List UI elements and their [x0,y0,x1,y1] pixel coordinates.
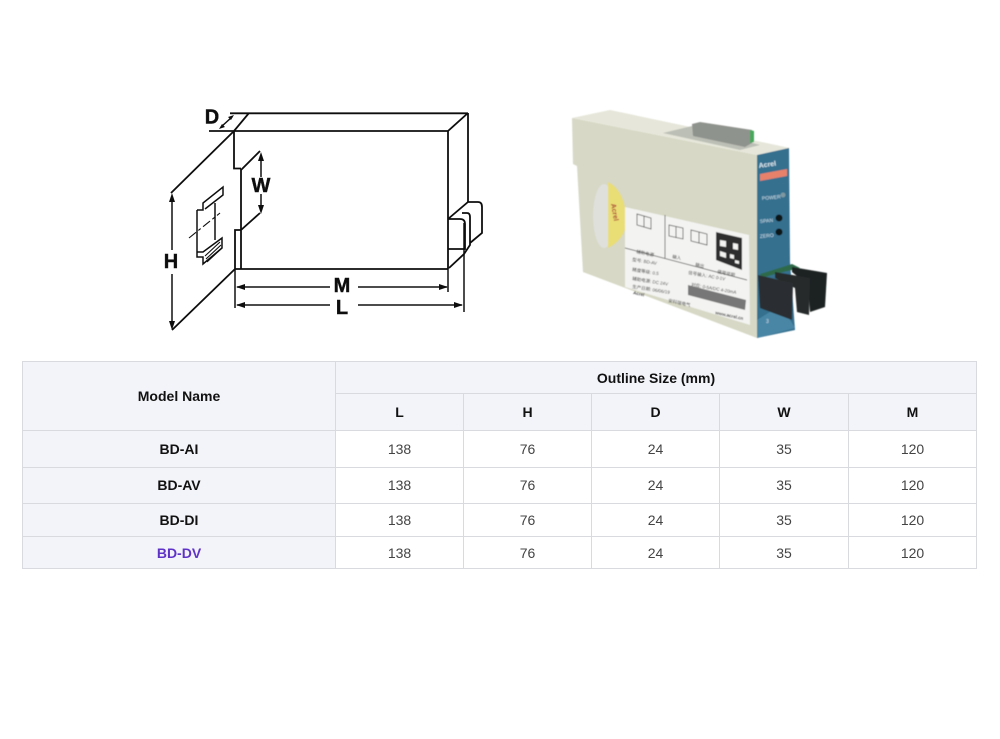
row: BD-AV: BD-AV [157,476,201,492]
extension lines [235,223,464,312]
label M: M [334,275,350,297]
header: model name: Model Name [138,388,220,404]
row: BD-AI: 35 [776,441,792,457]
row: BD-AV: 138 [388,476,411,492]
row: BD-DI: 120 [901,512,924,528]
panel labels: 3 [766,319,769,325]
dimension arrows [169,115,463,330]
arrow: H [169,193,175,330]
header: H: H [522,404,533,420]
header: L: L [395,404,404,420]
front panel [757,148,795,338]
arrow: M [236,284,448,290]
round sticker [593,182,627,248]
module top face [572,110,790,155]
white label: 对应: 0-5A/DC 4-20mA [691,281,737,296]
DIN rail cutout [197,187,223,264]
label H: H [164,251,178,273]
white label: 使用说明 [717,268,736,279]
led and knobs [776,192,786,236]
row: BD-DV: 76 [520,544,535,560]
row: BD-AI: 138 [388,441,411,457]
header: outline size [336,362,976,393]
header: W [720,394,848,430]
module body side [572,118,757,338]
brand on front panel: Acrel [758,161,777,170]
white label: 信号输入: AC 0-1V [688,269,726,282]
row: BD-AI: BD-AI [160,441,198,457]
row: BD-DV: 35 [776,544,792,560]
row: BD-DV: BD-DV [157,544,201,560]
white label: Acrel [633,290,645,297]
white label: 生产日期: 06/06/19 [632,283,671,296]
dimension diagram [164,106,483,331]
row: BD-DV: 138 [388,544,411,560]
row: BD-DV [23,537,924,568]
product photo [572,110,828,339]
row: BD-AI [23,431,924,467]
header: D: D [650,404,661,420]
header: L [336,394,463,430]
label D: D [205,106,219,128]
dimension letters [164,106,350,319]
red tag [760,169,787,181]
row: BD-AI: 76 [520,441,535,457]
device outline [171,113,482,330]
white label: 型号: BD-AV [632,256,657,267]
header: M [849,394,976,430]
row: BD-DV: 120 [901,544,924,560]
panel labels: POWER [762,194,781,202]
header: H [464,394,591,430]
white label: 辅助电源: DC 24V [632,275,669,288]
top connector [663,122,760,150]
header: M: M [907,404,918,420]
panel labels: SPAN [760,218,774,225]
terminal [448,202,482,268]
panel labels [760,194,781,325]
panel labels: ZERO [760,233,774,240]
white label: 安科瑞电气 [668,297,692,309]
row: BD-AV [23,468,924,503]
header: outline size: Outline Size (mm) [597,370,715,386]
row: BD-DI [23,504,924,536]
row: BD-AV: 120 [901,476,924,492]
white label: www.acrel.cn [714,310,744,321]
white label [625,207,750,325]
white label: 输出 [695,261,705,270]
label L: L [336,297,348,319]
header: W: W [777,404,791,420]
row: BD-DI: 76 [520,512,535,528]
arrow: D [219,115,234,129]
label W: W [252,175,271,197]
row: BD-DI: BD-DI [160,512,198,528]
header: D [592,394,719,430]
white label: 精度等级: 0.5 [632,266,660,277]
arrow: W [258,152,264,214]
row: BD-DV: 24 [648,544,663,560]
output terminals [758,264,827,320]
header: model name [23,362,335,430]
row: BD-AI: 24 [648,441,663,457]
row: BD-AI: 120 [901,441,924,457]
row: BD-DI: 24 [648,512,663,528]
row: BD-AV: 35 [776,476,792,492]
round sticker: Acrel [609,203,619,222]
row: BD-AV: 76 [520,476,535,492]
row: BD-DI: 138 [388,512,411,528]
white label: 输入 [672,253,682,262]
barcode [688,285,746,310]
row: BD-AV: 24 [648,476,663,492]
QR code [716,232,742,270]
row: BD-DI: 35 [776,512,792,528]
arrow: L [236,302,463,308]
white label: 辅助电源 [636,248,655,259]
